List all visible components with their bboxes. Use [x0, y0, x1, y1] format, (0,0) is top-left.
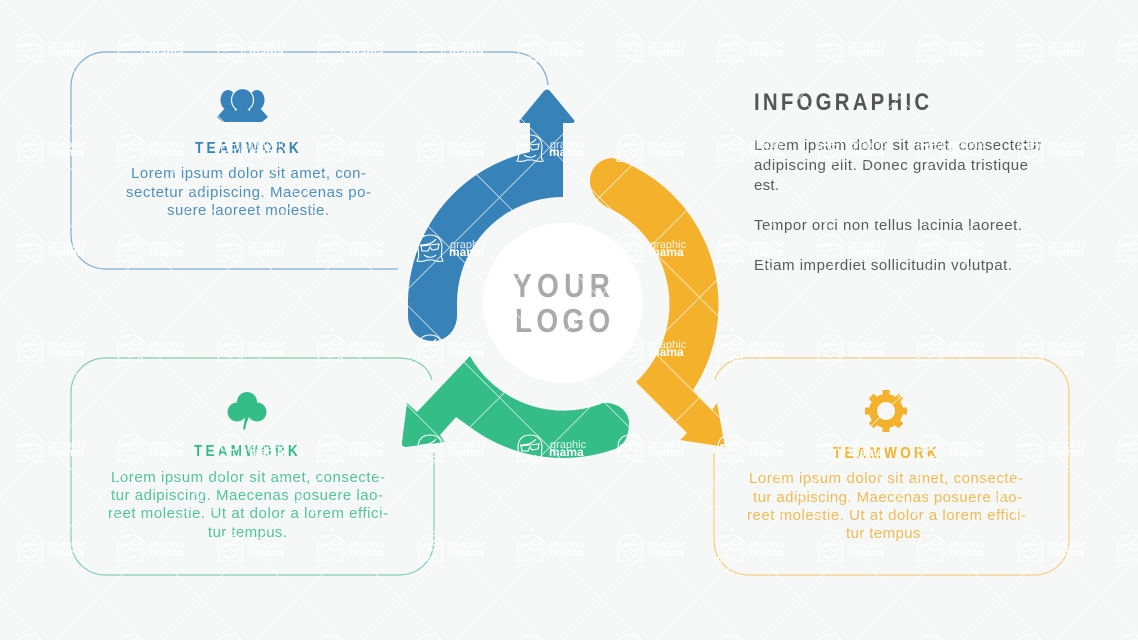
heading: teamwork: TEAMWORK	[195, 140, 299, 157]
panel: green teamwork	[71, 358, 434, 575]
icon: people	[217, 88, 268, 122]
text block: right description: Tempor orci non tellus lacinia laoreet.	[754, 217, 1022, 234]
text block: green description	[108, 469, 388, 541]
text block: right description: Etiam imperdiet sollicitudin volutpat.	[754, 257, 1012, 274]
text block: orange description	[747, 470, 1026, 542]
icon: gear	[865, 390, 907, 432]
text block: orange description: tur tempus.	[846, 525, 925, 542]
arrow: green	[402, 356, 629, 458]
blue panel outline	[71, 52, 548, 269]
logo text: YOUR	[513, 268, 610, 305]
text block: green description: reet molestie. Ut at dolor a lorem effici-	[108, 505, 388, 522]
text block: green description: tur tempus.	[208, 524, 287, 541]
text block: blue description: suere laoreet molestie.	[167, 202, 329, 219]
center logo circle	[483, 223, 643, 383]
heading: infographic: INFOGRAPHIC	[754, 88, 929, 115]
green panel outline	[71, 358, 434, 575]
text block: right description: adipiscing elit. Donec gravida tristique	[754, 157, 1028, 174]
panel: orange teamwork	[714, 358, 1069, 575]
text block: green description: Lorem ipsum dolor sit amet, consecte-	[111, 469, 385, 486]
text block: right description: Lorem ipsum dolor sit amet, consectetur	[754, 137, 1042, 154]
arrow: orange	[590, 158, 725, 447]
text block: right description	[754, 137, 1042, 274]
text block: blue description	[126, 165, 371, 219]
arrow: blue	[408, 90, 575, 341]
logo text: LOGO	[515, 303, 610, 340]
text block: right description: est.	[754, 177, 779, 194]
heading: teamwork: TEAMWORK	[194, 443, 298, 460]
panel: blue teamwork	[71, 52, 548, 269]
icon: clover	[228, 392, 266, 430]
text block: orange description: Lorem ipsum dolor sit amet, consecte-	[749, 470, 1023, 487]
text block: blue description: Lorem ipsum dolor sit amet, con-	[131, 165, 366, 182]
text block: orange description: tur adipiscing. Maecenas posuere lao-	[753, 489, 1022, 506]
orange panel outline	[714, 358, 1069, 575]
text block: orange description: reet molestie. Ut at dolor a lorem effici-	[747, 507, 1026, 524]
logo text	[513, 268, 610, 340]
text block: blue description: sectetur adipiscing. Maecenas po-	[126, 184, 371, 201]
text block: green description: tur adipiscing. Maecenas posuere lao-	[111, 487, 383, 504]
heading: teamwork: TEAMWORK	[833, 445, 937, 462]
